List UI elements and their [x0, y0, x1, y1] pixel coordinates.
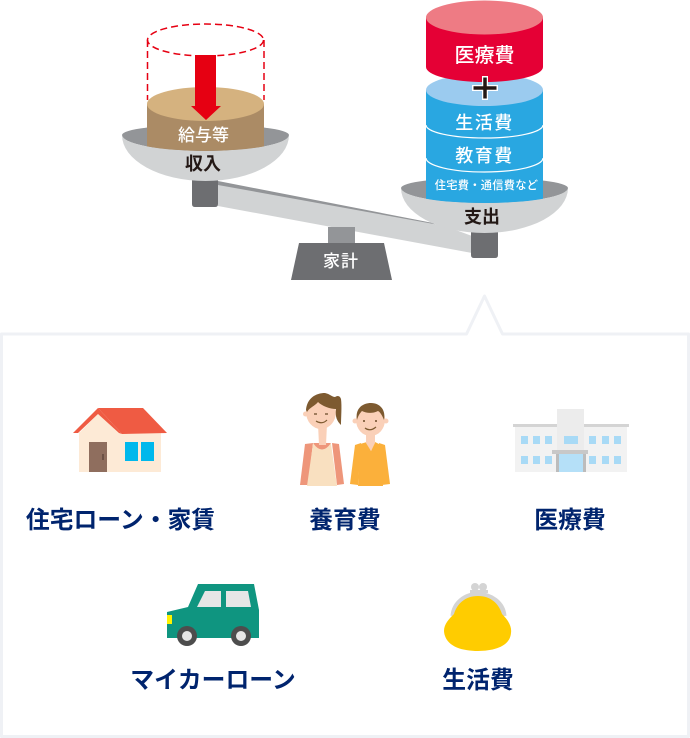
icon: mother and child — [300, 393, 390, 486]
label: housing and communication costs: 住宅費・通信費など — [435, 178, 538, 192]
label: salary: 給与等 — [178, 126, 229, 145]
dashed target outline — [148, 24, 264, 100]
blue cylinder: current expenses — [426, 74, 543, 203]
right pan: expenses — [401, 178, 568, 233]
label: expenses: 支出 — [464, 207, 500, 227]
left pan: income — [122, 87, 289, 181]
icon: coin purse — [444, 583, 511, 651]
arrow: income decrease — [191, 55, 221, 120]
child — [350, 403, 390, 486]
right pan post — [471, 230, 498, 258]
icon: hospital — [513, 409, 629, 472]
scale center post — [328, 227, 355, 245]
label: education costs: 教育費 — [455, 146, 514, 166]
label: childcare costs: 養育費 — [309, 507, 381, 534]
plus sign — [472, 76, 498, 100]
red cylinder: medical expenses — [426, 0, 543, 82]
panel: expense breakdown callout — [2, 296, 688, 736]
balance scale beam — [218, 181, 472, 253]
label: living costs: 生活費 — [455, 113, 514, 133]
mother — [300, 393, 344, 486]
label: medical costs: 医療費 — [534, 507, 606, 534]
label: income: 収入 — [185, 154, 221, 174]
icon: house — [73, 408, 167, 472]
label: car loan: マイカーローン — [130, 667, 296, 694]
label: living costs: 生活費 — [442, 667, 514, 694]
left pan post — [192, 178, 218, 207]
label: medical costs: 医療費 — [454, 44, 514, 67]
label: housing loan and rent: 住宅ローン・家賃 — [26, 507, 215, 534]
scale base: household — [291, 243, 392, 280]
income cylinder — [147, 87, 264, 151]
icon: car — [167, 584, 259, 646]
scale base: household: 家計 — [323, 252, 359, 271]
